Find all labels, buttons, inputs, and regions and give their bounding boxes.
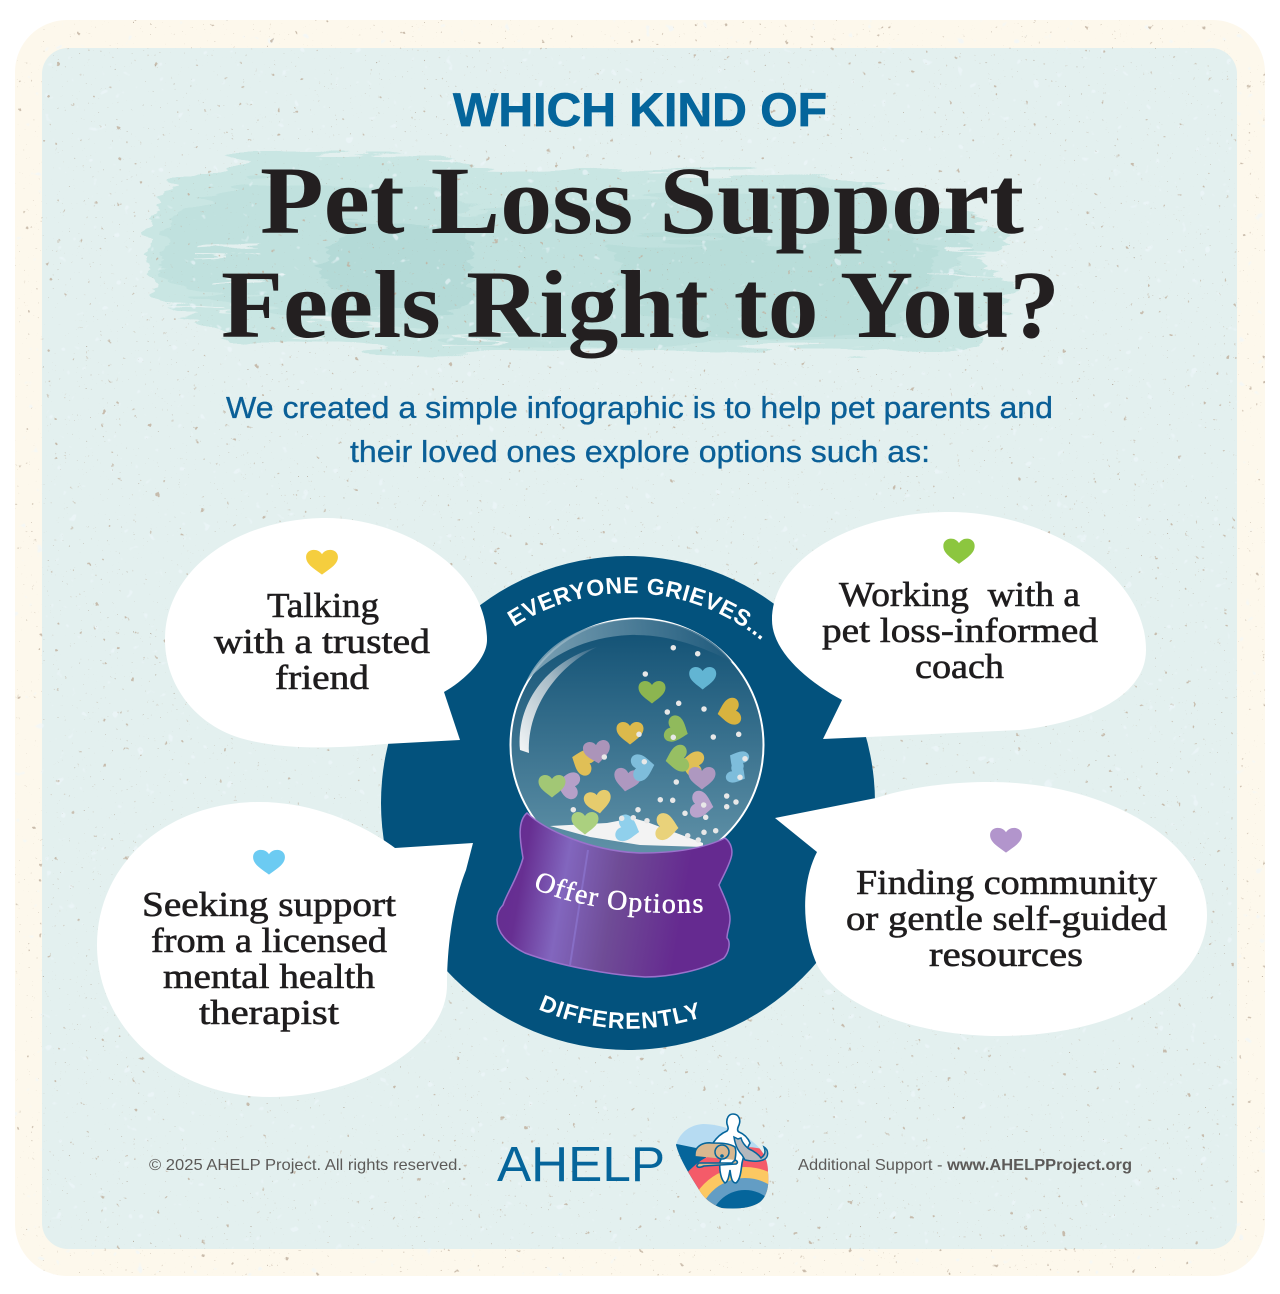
speech bubble: community or self-guided resources	[775, 782, 1207, 1036]
text	[214, 587, 430, 697]
purple base	[497, 813, 732, 977]
bubble shape	[165, 518, 487, 747]
wordmark: AHELP	[497, 1138, 665, 1192]
person	[713, 1114, 750, 1183]
text: therapist	[199, 994, 339, 1032]
bubble shape	[772, 512, 1146, 739]
intro text: We created a simple infographic is to help pet parents and	[226, 390, 1053, 425]
base highlight sheen	[570, 850, 588, 965]
bubble shape	[97, 802, 473, 1097]
central navy circle	[381, 556, 875, 1050]
icon: yellow heart	[306, 550, 338, 575]
dog	[695, 1143, 737, 1167]
cat	[734, 1137, 768, 1161]
text: friend	[275, 659, 369, 697]
text	[822, 576, 1098, 686]
curved text: differently: DIFFERENTLY	[539, 995, 698, 1029]
heading: which kind of: WHICH KIND OF	[453, 83, 827, 136]
intro text: their loved ones explore options such as:	[350, 434, 930, 469]
text: mental health	[163, 958, 375, 996]
text: Seeking support	[142, 886, 396, 924]
text: or gentle self-guided	[846, 900, 1167, 938]
footer copyright: © 2025 AHELP Project. All rights reserved.	[149, 1157, 462, 1174]
base label: Offer Options	[536, 873, 703, 918]
text: with a trusted	[214, 623, 430, 661]
watercolor brush stroke	[148, 153, 1018, 352]
snow globe	[496, 618, 764, 978]
icon: blue heart	[253, 850, 285, 875]
text: resources	[929, 936, 1083, 974]
speech bubble: pet loss-informed coach	[772, 512, 1146, 739]
AHELP logo	[497, 1113, 768, 1208]
speech bubble: talking with a trusted friend	[165, 518, 487, 747]
title	[221, 147, 1060, 358]
icon: purple heart	[990, 828, 1022, 853]
glass sphere	[510, 618, 764, 872]
text	[846, 864, 1167, 974]
text: Talking	[267, 587, 379, 625]
person and pets	[695, 1114, 768, 1183]
text: coach	[915, 648, 1004, 686]
text: from a licensed	[151, 922, 387, 960]
floating hearts	[538, 667, 751, 845]
glass highlight	[520, 647, 597, 753]
rainbow emblem	[676, 1124, 768, 1208]
title: Feels Right to You?	[221, 251, 1060, 358]
footer additional support: Additional Support - www.AHELPProject.org	[798, 1157, 1132, 1174]
curved text: everyone grieves: EVERYONE GRIEVES...	[507, 577, 762, 640]
text	[142, 886, 396, 1032]
intro text	[226, 390, 1053, 469]
speech bubble: licensed mental health therapist	[97, 802, 473, 1097]
text: Working with a	[839, 576, 1080, 614]
text: Finding community	[856, 864, 1158, 902]
text: pet loss-informed	[822, 612, 1098, 650]
bubble shape	[775, 782, 1207, 1036]
snowflake dots	[573, 648, 745, 840]
glass top reflection	[526, 619, 732, 682]
icon: green heart	[943, 539, 975, 564]
snow pile	[550, 818, 703, 847]
title: Pet Loss Support	[260, 147, 1024, 254]
